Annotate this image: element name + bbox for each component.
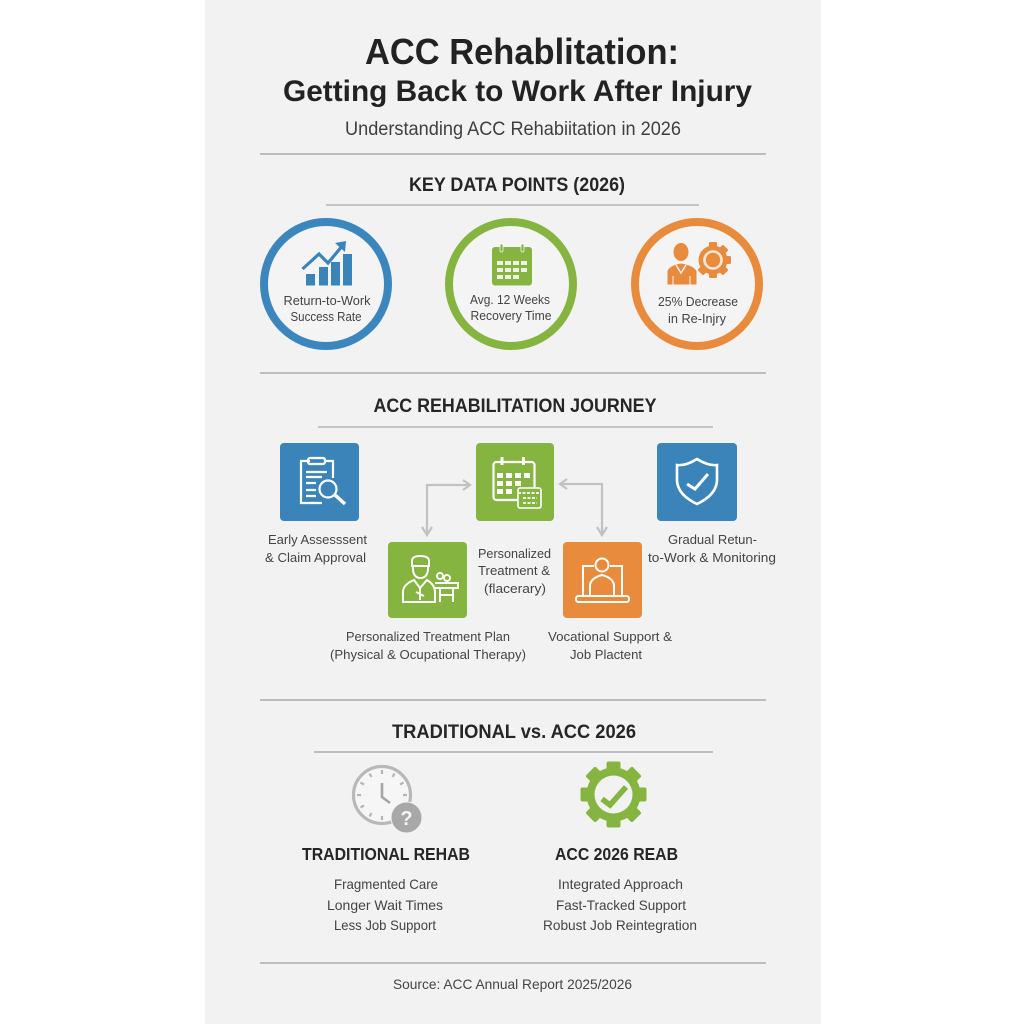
list	[327, 876, 443, 933]
label: vocational support: Vocational Support &	[548, 629, 672, 644]
list: Longer Wait Times	[327, 897, 443, 913]
list: Less Job Support	[334, 917, 436, 933]
title: Getting Back to Work After Injury	[283, 75, 752, 108]
heading: journey: ACC REHABILITATION JOURNEY	[374, 395, 656, 417]
icon: shield check	[677, 459, 717, 504]
list: Fragmented Care	[334, 876, 438, 892]
label: personalized treatment floating: (flacerary)	[484, 581, 546, 596]
step: calendar	[476, 443, 554, 521]
stat: return-to-work	[264, 222, 388, 346]
list: Fast-Tracked Support	[556, 897, 686, 913]
label: Return-to-Work	[284, 294, 371, 308]
label	[470, 293, 552, 323]
list: Robust Job Reintegration	[543, 917, 697, 933]
label	[284, 294, 371, 324]
heading: ACC 2026 REAB	[555, 844, 678, 864]
label: personalized treatment floating: Treatment &	[478, 563, 550, 578]
label: Recovery Time	[470, 309, 552, 323]
label: personalized treatment floating	[478, 546, 551, 596]
heading: TRADITIONAL REHAB	[302, 844, 470, 864]
label: Gradual Retun-	[668, 532, 757, 547]
label: in Re-Injry	[668, 312, 727, 326]
icon: clinician and table	[403, 556, 458, 602]
label: vocational support: Job Plactent	[570, 647, 642, 662]
label: Success Rate	[290, 310, 362, 324]
subtitle: Understanding ACC Rehabiitation in 2026	[345, 118, 681, 140]
title	[283, 31, 752, 108]
step: gradual return	[648, 443, 776, 565]
step: vocational support	[563, 542, 642, 618]
label: treatment plan: (Physical & Ocupational Therapy)	[330, 647, 526, 662]
list: Integrated Approach	[558, 876, 683, 892]
label: to-Work & Monitoring	[648, 550, 776, 565]
label	[658, 295, 738, 326]
title: ACC Rehablitation:	[365, 31, 679, 72]
label: 25% Decrease	[658, 295, 738, 309]
label: Early Assesssent	[268, 532, 367, 547]
arrow: calendar to vocational	[560, 479, 607, 535]
heading: key data points: KEY DATA POINTS (2026)	[409, 174, 625, 196]
icon: clock with question mark: ?	[400, 808, 413, 830]
icon: calendars	[494, 457, 541, 508]
step: early assessment	[265, 443, 367, 565]
column: acc 2026 rehab	[543, 762, 697, 933]
label: & Claim Approval	[265, 550, 366, 565]
label: vocational support	[548, 629, 672, 662]
source: Source: ACC Annual Report 2025/2026	[393, 976, 632, 992]
icon: clipboard and magnifier	[301, 458, 345, 504]
heading: comparison: TRADITIONAL vs. ACC 2026	[392, 721, 636, 743]
label: personalized treatment floating: Personalized	[478, 546, 551, 561]
column: traditional rehab	[302, 766, 470, 933]
icon: calendar	[492, 244, 532, 286]
label: treatment plan	[330, 629, 526, 662]
icon: gear with check	[580, 762, 646, 828]
icon: clock with question mark	[354, 766, 422, 833]
label	[265, 532, 367, 565]
label	[648, 532, 776, 565]
icon: bar chart with arrow	[302, 241, 352, 286]
label: treatment plan: Personalized Treatment Plan	[346, 629, 510, 644]
arrow: calendar to treatment	[422, 480, 470, 535]
list	[543, 876, 697, 933]
background panel	[205, 0, 821, 1024]
icon: person at laptop	[576, 558, 629, 602]
icon: person and gear	[667, 242, 731, 285]
stat: recovery time	[449, 222, 573, 346]
step: treatment plan	[388, 542, 467, 618]
label: Avg. 12 Weeks	[470, 293, 550, 307]
stat: re-injury	[635, 222, 759, 346]
